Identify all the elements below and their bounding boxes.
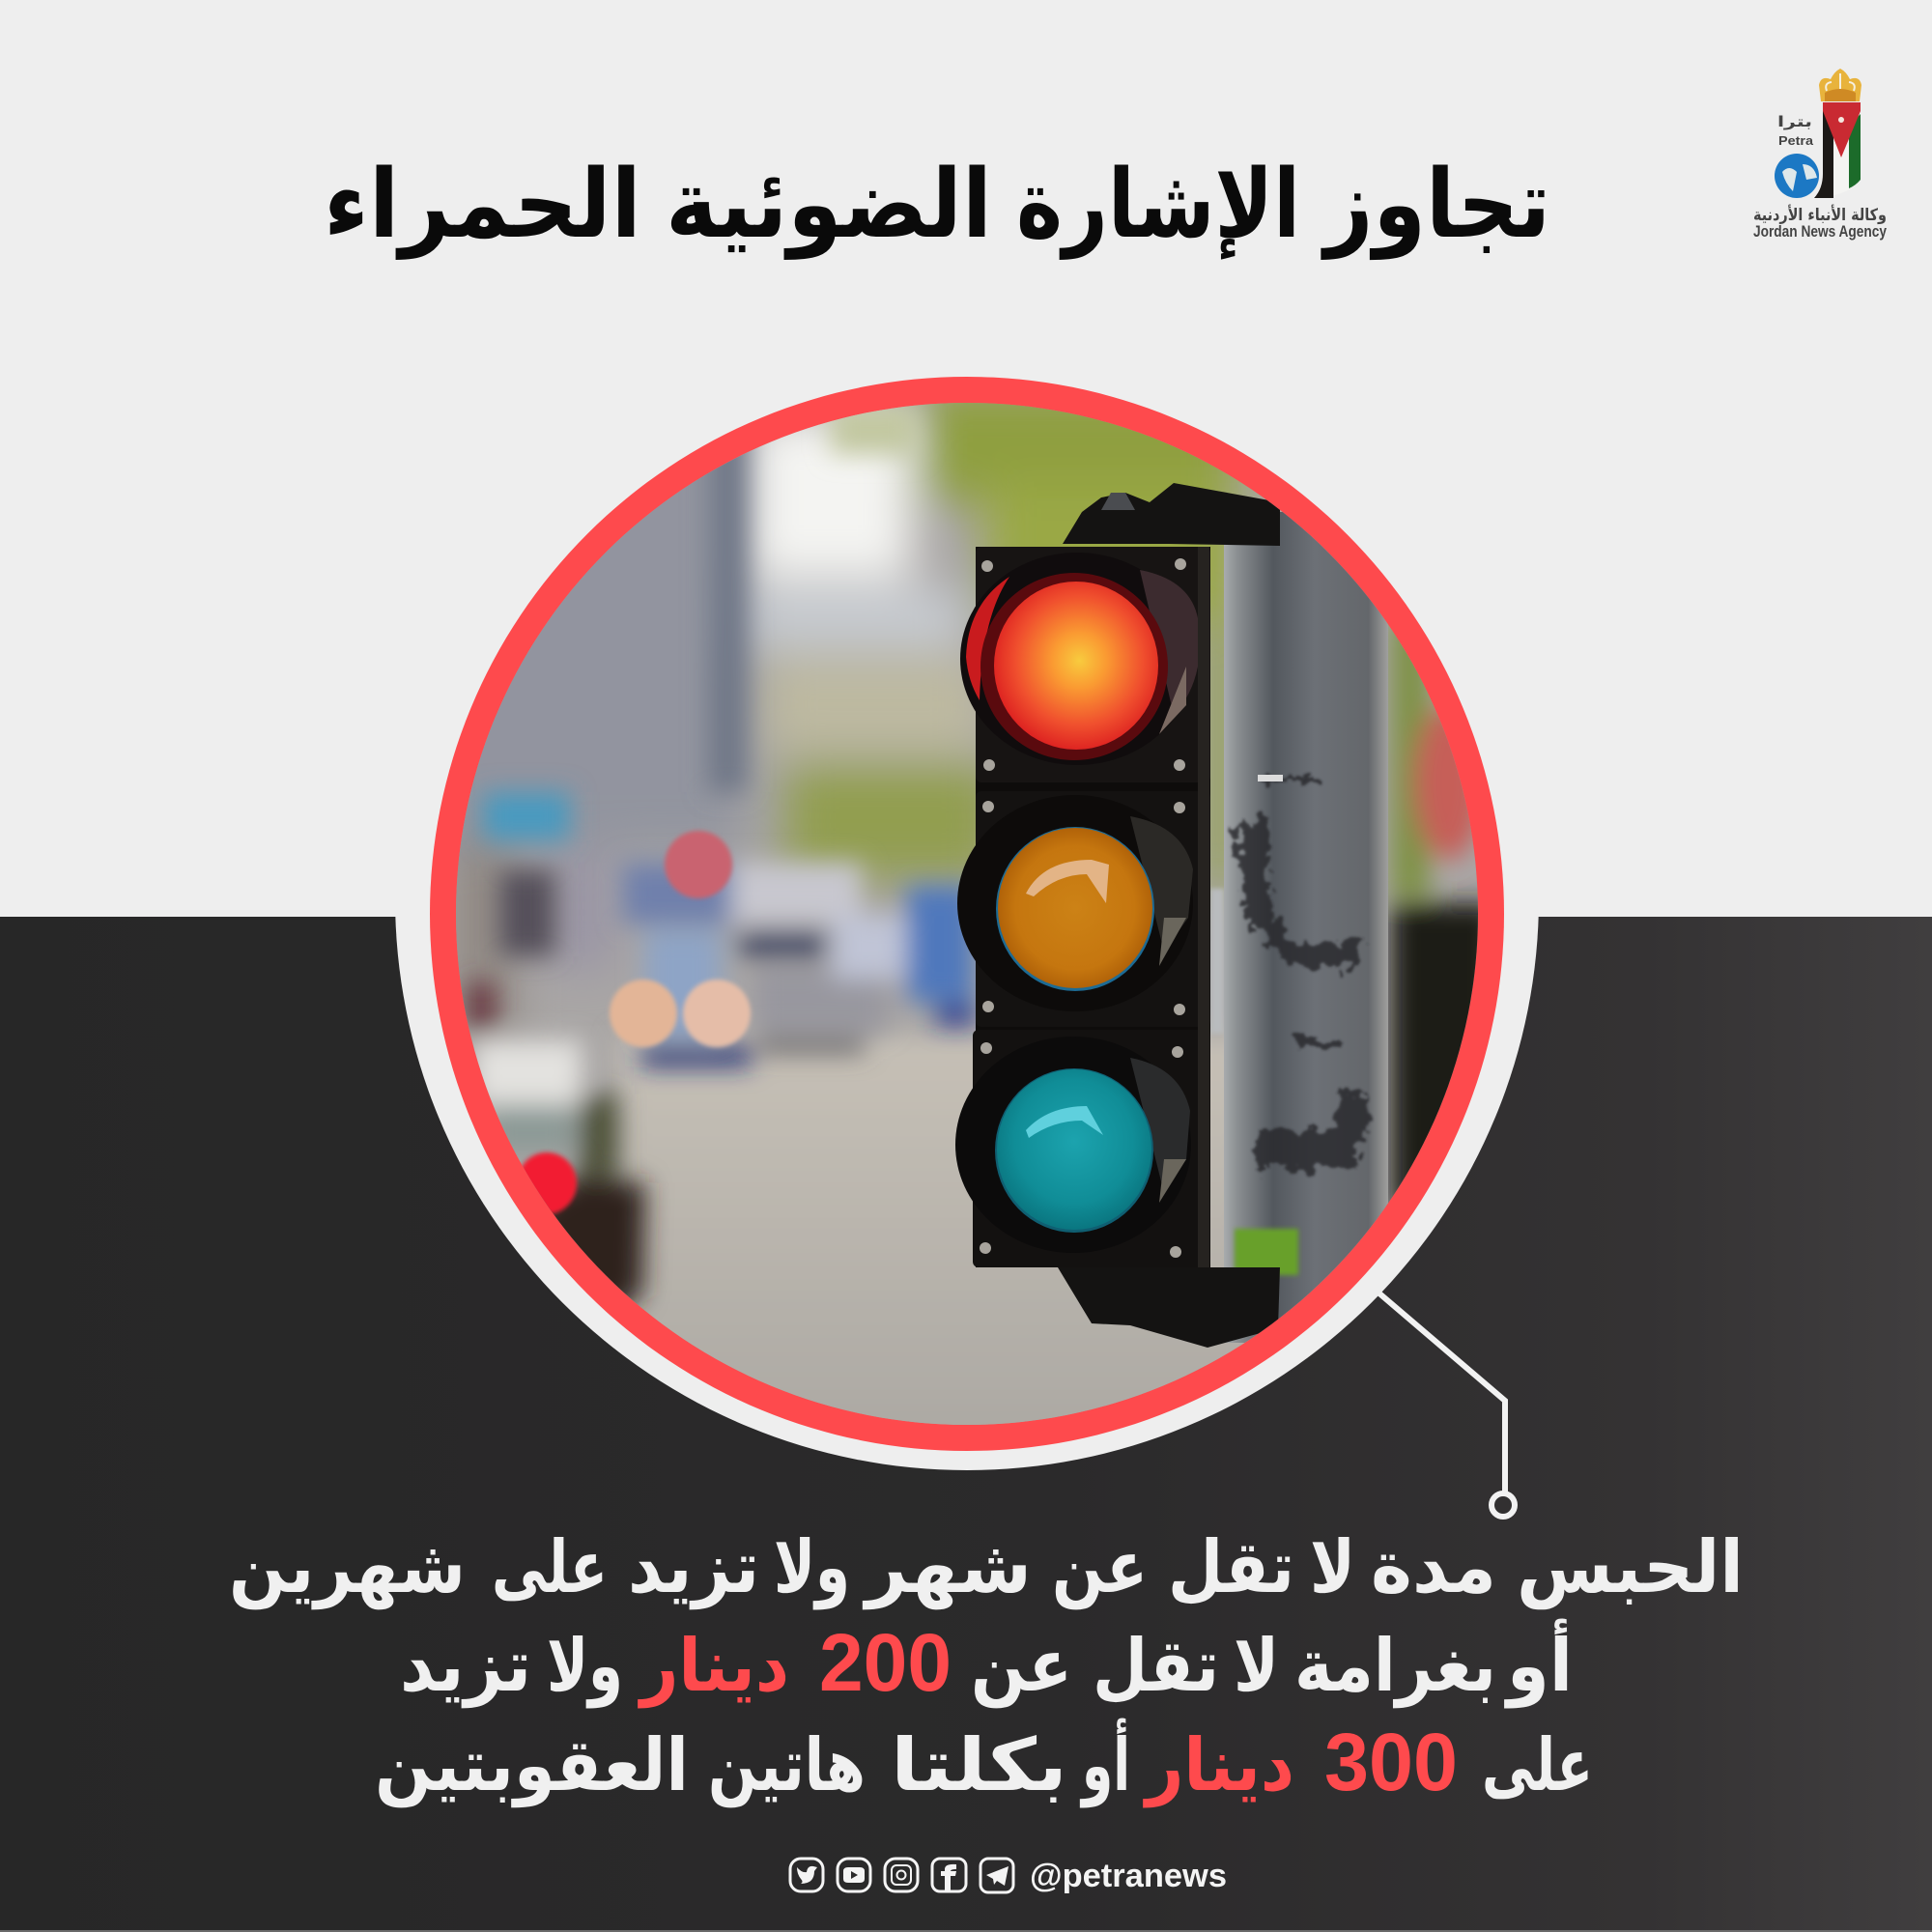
icon: youtube: [838, 1859, 870, 1891]
line 3: العقوبتين: [375, 1722, 689, 1808]
line 2: دينار: [637, 1623, 789, 1708]
icon: telegram: [980, 1859, 1013, 1892]
background: dark bottom: [0, 917, 1932, 1932]
line 3: دينار: [1142, 1722, 1294, 1807]
logo globe: [1775, 154, 1819, 198]
footer handle: @petranews: [1030, 1858, 1227, 1894]
line 2: ولا: [547, 1623, 623, 1709]
logo text: Petra: [1778, 134, 1814, 148]
line 2: تقل: [1093, 1623, 1219, 1708]
line 1: على: [492, 1524, 608, 1609]
icon: Petra logo: [1753, 69, 1887, 241]
icon: instagram: [885, 1859, 918, 1891]
line 3: على: [1482, 1722, 1593, 1807]
footer social icons: [790, 1859, 1013, 1892]
line 3: [375, 1717, 1593, 1808]
line 1: عن: [1052, 1524, 1148, 1610]
line 1: شهرين: [229, 1524, 466, 1610]
logo crown: [1819, 69, 1861, 101]
line 1: تقل: [1168, 1524, 1294, 1609]
line 1: تزيد: [628, 1524, 759, 1610]
line 1: لا: [1310, 1524, 1355, 1609]
line 2: [400, 1617, 1573, 1709]
title: الحمراء: [324, 150, 641, 260]
photo: traffic light street scene: [456, 403, 1478, 1425]
green lamp: [955, 1058, 1190, 1233]
line 3: أو: [1079, 1718, 1130, 1808]
logo text: وكالة الأنباء الأردنية: [1753, 205, 1887, 225]
circle frame: light ring: [395, 327, 1539, 1470]
line 1: الحبس: [1517, 1524, 1744, 1609]
line 2: أو: [1503, 1618, 1573, 1709]
pole: [1224, 512, 1388, 1343]
line 2: عن: [971, 1623, 1072, 1709]
logo flag: [1814, 102, 1861, 198]
logo text: Jordan News Agency: [1753, 222, 1887, 241]
line 3: بكلتا: [891, 1722, 1067, 1807]
body text: [229, 1524, 1744, 1808]
title: الضوئية: [666, 150, 992, 260]
line 2: لا: [1234, 1623, 1279, 1708]
blurred street background: [456, 403, 1478, 1425]
red lamp: [960, 553, 1198, 765]
title: تجاوز: [1321, 150, 1550, 261]
background: light top: [0, 0, 1932, 918]
top bracket: [1063, 483, 1280, 546]
line 3: 300: [1324, 1717, 1458, 1807]
line 1: مدة: [1371, 1524, 1496, 1609]
signal housing: [973, 547, 1210, 1267]
connector line with ring: [1379, 1293, 1515, 1517]
line 2: 200: [819, 1617, 952, 1708]
circle frame: red ring: [430, 377, 1504, 1451]
line 1: [229, 1524, 1744, 1610]
line 3: هاتين: [708, 1722, 866, 1808]
bottom bracket: [1058, 1267, 1280, 1348]
title: [324, 150, 1550, 261]
icon: facebook: [932, 1859, 966, 1891]
line 2: بغرامة: [1294, 1623, 1496, 1709]
line 2: تزيد: [400, 1623, 531, 1709]
amber lamp: [957, 816, 1193, 991]
line 1: ولا: [774, 1524, 850, 1610]
logo text: [1753, 113, 1887, 241]
logo text: بترا: [1777, 113, 1812, 130]
icon: twitter: [790, 1859, 823, 1891]
title: الإشارة: [1016, 150, 1300, 261]
line 1: شهر: [862, 1524, 1032, 1610]
